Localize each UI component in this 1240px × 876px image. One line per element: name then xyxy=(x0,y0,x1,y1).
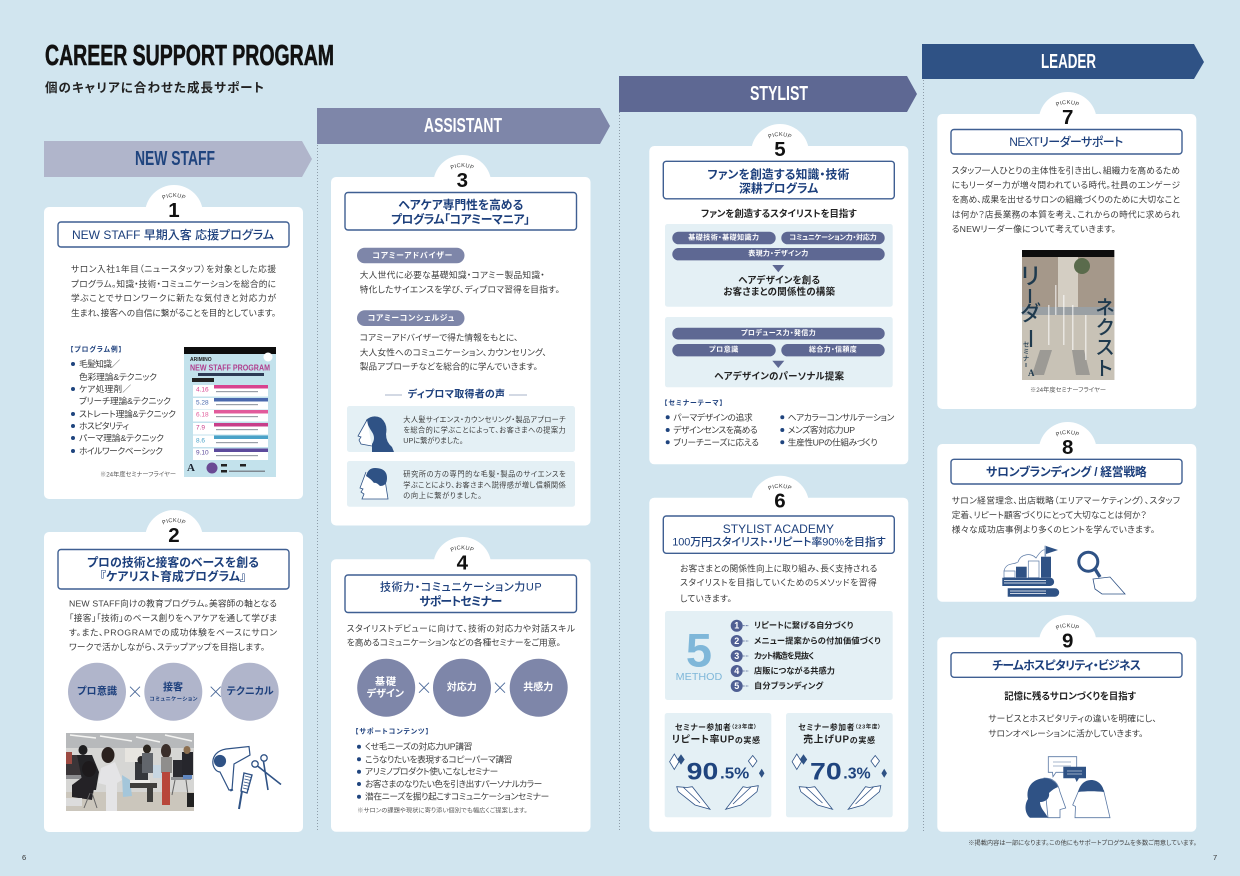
subtitle: 個のキャリアに合わせた成長サポート xyxy=(45,80,264,95)
body text: にもリーダー力が増々問われている時代。社員のエンゲージ xyxy=(952,179,1181,190)
heading box xyxy=(951,459,1182,484)
program list: 色彩理論&テクニック xyxy=(79,371,157,382)
body text: 定着、リピート顧客づくりにとって大切なことは何か？ xyxy=(952,509,1147,520)
heading box: STYLIST ACADEMY xyxy=(723,522,834,536)
stat: sales up xyxy=(786,713,893,817)
flyer: new staff program: 6.18 xyxy=(196,412,209,418)
panel: 5 method: METHOD xyxy=(676,671,723,683)
body text xyxy=(71,263,276,318)
pickup badge 4: PICKUP xyxy=(450,545,474,552)
pickup badge 2: PICKUP xyxy=(162,518,186,524)
stat: sales up: セミナー参加者（23年度） xyxy=(798,722,881,732)
body text: サービスとホスピタリティの違いを明確にし、 xyxy=(988,713,1157,724)
flyer: new staff program: ARIMINO xyxy=(190,357,212,363)
panel: pickup 5 xyxy=(649,124,908,464)
seminar themes: デザインセンスを高める xyxy=(673,424,758,435)
panel: personal proposal: 総合力・信頼度 xyxy=(809,345,857,354)
stat: sales up: 70 xyxy=(810,758,842,786)
panel: pickup 4 xyxy=(331,537,590,832)
panel: 5 method: リピートに繋げる自分づくり xyxy=(754,620,853,630)
program list: ストレート理論&テクニック xyxy=(79,408,176,419)
flyer: next leader seminar: ス xyxy=(1096,337,1114,359)
lead text: 記憶に残るサロンづくりを目指す xyxy=(1004,690,1136,702)
pickup badge 8: PICKUP xyxy=(1056,430,1079,436)
body text xyxy=(680,562,877,603)
pickup badge 4 xyxy=(450,545,474,574)
support contents list xyxy=(355,728,549,814)
body text xyxy=(69,597,277,652)
text: concierge: 製品アプローチなどを総合的に学んでいきます。 xyxy=(360,361,538,372)
stat: repeat rate xyxy=(665,713,771,817)
body text: スタイリストを目指していくための5メソッドを習得 xyxy=(680,577,877,588)
panel: relationship building: 基礎技術・基礎知識力 xyxy=(688,232,759,242)
panel: pickup 3 xyxy=(331,155,590,526)
flyer: new staff program: 7.9 xyxy=(196,424,205,432)
heading box: 技術力・コミュニケーション力UP xyxy=(380,579,542,593)
heading box: NEW STAFF 早期入客 応援プログラム xyxy=(72,227,274,242)
arrow: LEADER: LEADER xyxy=(1041,51,1096,73)
body text xyxy=(951,164,1181,234)
support contents list: くせ毛ニーズの対応力UP講習 xyxy=(365,741,472,752)
voice 2: 研究所の方の専門的な毛髪・製品のサイエンスを xyxy=(403,470,566,478)
heading box: サポートセミナー xyxy=(419,595,502,609)
three circles: テクニカル xyxy=(226,686,274,698)
panel: relationship building: コミュニケーション力・対応力 xyxy=(789,232,877,242)
body text: す。また、PROGRAMでの成功体験をベースにサロン xyxy=(69,626,277,637)
arrow: LEADER xyxy=(922,44,1204,79)
panel: 5 method xyxy=(665,611,893,700)
three circles: 基礎 xyxy=(375,675,396,688)
flyer: new staff program xyxy=(184,347,276,477)
voice 2: 学ぶことにより、お客さまへ説得感が増し信頼関係 xyxy=(403,480,566,490)
pickup badge 6: 6 xyxy=(774,490,786,513)
pickup badge 2 xyxy=(162,518,186,547)
flyer: next leader seminar: セ xyxy=(1023,340,1029,348)
panel: personal proposal: プロ意識 xyxy=(709,345,738,354)
seminar themes: ヘアカラーコンサルテーション xyxy=(788,412,894,422)
panel: 5 method: 自分ブランディング xyxy=(754,680,824,690)
panel: 5 method: 2 xyxy=(734,636,739,646)
body text: を高め、成果を出せるサロンの組織づくりのために大切なこと xyxy=(952,194,1180,205)
flyer: new staff program: 8.6 xyxy=(196,438,205,444)
support contents list: アリミノプロダクト使いこなしセミナー xyxy=(365,766,498,777)
heading box: プログラム「コアミーマニア」 xyxy=(391,212,530,226)
seminar themes: 【セミナーテーマ】 xyxy=(664,399,723,407)
stat: repeat rate: リピート率UPの実感 xyxy=(672,732,760,746)
heading box: 『ケアリスト育成プログラム』 xyxy=(100,570,246,584)
program list: ホイルワークベーシック xyxy=(79,446,163,456)
program list: ホスピタリティ xyxy=(79,421,129,431)
stat: repeat rate: セミナー参加者（23年度） xyxy=(675,722,757,732)
icon: long hair head xyxy=(358,416,394,452)
arrow: NEW STAFF: NEW STAFF xyxy=(135,148,215,170)
pickup badge 1: 1 xyxy=(168,199,180,222)
heading box: ヘアケア専門性を高める xyxy=(398,198,523,212)
pickup badge 9: PICKUP xyxy=(1056,623,1079,630)
panel: relationship building: ヘアデザインを創る xyxy=(738,274,820,286)
heading box: ファンを創造する知識・技術 xyxy=(707,167,849,181)
heading box: 100万円スタイリスト・リピート率90%を目指す xyxy=(672,535,886,549)
panel: 5 method: カット構造を見抜く xyxy=(754,650,814,660)
arrow: NEW STAFF xyxy=(44,141,312,177)
body text: を高めるコミュニケーションなどの各種セミナーをご用意。 xyxy=(347,637,561,648)
flyer: next leader seminar: ト xyxy=(1097,358,1113,380)
program list: ケア処理剤／ xyxy=(79,383,131,394)
program list: ※24年度セミナーフライヤー xyxy=(100,470,176,478)
panel: relationship building xyxy=(665,224,893,307)
icon: diamonds and hands xyxy=(670,754,764,809)
heading box xyxy=(663,516,894,553)
heading box: チームホスピタリティ・ビジネス xyxy=(992,659,1141,673)
pickup badge 7 xyxy=(1056,100,1079,129)
body text: 学ぶことでサロンワークに新たな気付きと対応力が xyxy=(71,292,276,303)
panel: pickup 1 xyxy=(44,185,303,499)
body text: スタッフ一人ひとりの主体性を引き出し、組織力を高めるため xyxy=(951,164,1180,175)
pickup badge 4: 4 xyxy=(457,551,469,574)
support contents list: こうなりたいを表現するコピーパーマ講習 xyxy=(365,753,512,764)
flyer: next leader seminar: ミ xyxy=(1023,348,1029,356)
page number 6: 6 xyxy=(22,853,26,862)
pickup badge 8 xyxy=(1056,430,1079,459)
support contents list: ※サロンの課題や現状に寄り添い個別でも幅広くご提案します。 xyxy=(357,806,527,814)
title: CAREER SUPPORT PROGRAM xyxy=(45,40,334,72)
pickup badge 1 xyxy=(162,193,186,222)
heading box: NEXTリーダーサポート xyxy=(1009,134,1123,149)
seminar themes: ブリーチニーズに応える xyxy=(673,436,759,447)
panel: relationship building: お客さまとの関係性の構築 xyxy=(723,286,836,297)
body text: サロン経営理念、出店戦略（エリアマーケティング）、スタッフ xyxy=(951,494,1180,505)
icon: diamonds and hands xyxy=(792,754,886,809)
heading box xyxy=(345,575,576,612)
heading box xyxy=(58,222,289,247)
voice 1: を総合的に学ぶことによって、お客さまへの提案力 xyxy=(403,426,566,434)
text: adviser xyxy=(360,269,560,294)
body text: していきます。 xyxy=(680,593,732,603)
flyer: new staff program: 9.10 xyxy=(196,450,209,456)
caption: ※24年度セミナーフライヤー xyxy=(1030,386,1106,394)
pickup badge 9 xyxy=(1056,623,1079,652)
pickup badge 5: PICKUP xyxy=(768,132,792,138)
body text xyxy=(988,713,1157,738)
text: adviser: 大人世代に必要な基礎知識・コアミー製品知識・ xyxy=(360,269,545,280)
body text: ワークで活かしながら、ステップアップを目指します。 xyxy=(69,641,265,652)
pickup badge 7: PICKUP xyxy=(1056,100,1079,106)
panel: 5 method: 店販につながる共感力 xyxy=(754,666,835,676)
flyer: next leader seminar: ネ xyxy=(1096,297,1114,319)
pickup badge 8: 8 xyxy=(1062,436,1073,459)
panel: 5 method: 1 xyxy=(734,621,739,631)
page number 7: 7 xyxy=(1213,853,1217,862)
seminar themes: 生産性UPの仕組みづくり xyxy=(788,436,878,447)
flyer: new staff program: 4.16 xyxy=(196,386,209,394)
body text: 生まれ、接客への自信に繋がることを目的としています。 xyxy=(71,307,276,318)
pickup badge 5: 5 xyxy=(774,138,786,161)
pickup badge 5 xyxy=(768,132,792,161)
program list: 【プログラム例】 xyxy=(70,344,122,354)
voice 1: UPに繋がりました。 xyxy=(403,436,463,445)
stat: repeat rate: .5% xyxy=(720,766,749,782)
body text: 様々な成功店事例より多くのヒントを学んでいきます。 xyxy=(952,524,1155,535)
heading box xyxy=(951,130,1182,154)
heading: diploma voices: ディプロマ取得者の声 xyxy=(407,388,505,400)
flyer: new staff program: NEW STAFF PROGRAM xyxy=(190,362,270,372)
body text: は何か？店長業務の本質を考え、これからの時代に求められ xyxy=(952,208,1180,219)
program list xyxy=(70,344,176,478)
panel: pickup 2 xyxy=(44,510,303,832)
flyer: next leader seminar: リ xyxy=(1021,263,1039,289)
flyer: next leader seminar: ナ xyxy=(1023,354,1029,362)
text: concierge: コアミーアドバイザーで得た情報をもとに、 xyxy=(360,332,518,343)
panel: 5 method: 5 xyxy=(686,624,712,676)
body text xyxy=(951,494,1180,535)
text: concierge: 大人女性へのコミュニケーション、カウンセリング、 xyxy=(360,346,547,357)
pickup badge 9: 9 xyxy=(1062,629,1073,652)
three circles xyxy=(357,659,568,717)
photo: seminar room xyxy=(66,733,194,811)
seminar themes xyxy=(664,399,894,447)
icon: two people talking xyxy=(1026,757,1110,818)
seminar themes: パーマデザインの追求 xyxy=(673,411,753,422)
flyer: next leader seminar xyxy=(1020,250,1114,380)
lead text: ファンを創造するスタイリストを目指す xyxy=(701,208,857,219)
label: core me concierge xyxy=(357,310,464,326)
flyer: new staff program: A xyxy=(187,462,195,474)
panel: 5 method: 3 xyxy=(734,651,739,661)
text: adviser: 特化したサイエンスを学び、ディプロマ習得を目指す。 xyxy=(360,283,560,294)
body text xyxy=(346,622,575,648)
arrow: STYLIST: STYLIST xyxy=(750,83,808,105)
panel: pickup 7 xyxy=(937,92,1196,409)
body text: るNEWリーダー像について考えていきます。 xyxy=(951,223,1116,234)
pickup badge 2: 2 xyxy=(168,524,180,547)
panel: pickup 6 xyxy=(649,476,908,832)
body text: スタイリストデビューに向けて、技術の対応力や対話スキル xyxy=(346,622,575,633)
body text: プログラム。知識・技術・コミュニケーションを総合的に xyxy=(71,278,276,289)
icon: magnifier xyxy=(1079,552,1125,594)
text: concierge xyxy=(360,332,547,372)
icon: dryer, comb, scissors xyxy=(213,746,281,809)
panel: 5 method: 5 xyxy=(734,681,739,691)
pickup badge 1: PICKUP xyxy=(162,193,186,200)
heading box xyxy=(951,653,1182,677)
stat: sales up: .3% xyxy=(843,766,871,782)
pickup badge 3: 3 xyxy=(457,169,468,192)
support contents list: お客さまのなりたい色を引き出すパーソナルカラー xyxy=(365,778,542,789)
seminar themes: メンズ客対応力UP xyxy=(787,424,855,435)
flyer: next leader seminar: ダ xyxy=(1020,302,1041,326)
heading box: サロンブランディング / 経営戦略 xyxy=(986,465,1147,479)
heading box: 深耕プログラム xyxy=(739,181,819,195)
panel: 5 method: メニュー提案からの付加価値づくり xyxy=(754,636,881,646)
label: core me adviser: コアミーアドバイザー xyxy=(372,251,453,260)
label: core me concierge: コアミーコンシェルジュ xyxy=(368,314,454,322)
heading box: プロの技術と接客のベースを創る xyxy=(87,556,259,570)
pickup badge 3 xyxy=(450,163,474,192)
three circles: 共感力 xyxy=(523,680,553,694)
pickup badge 3: PICKUP xyxy=(450,163,474,170)
stat: sales up: 売上げUPの実感 xyxy=(803,732,875,746)
body text: 「接客」「技術」のベース創りをヘアケアを通して学びま xyxy=(69,612,277,623)
three circles: デザイン xyxy=(366,687,404,700)
body text: お客さまとの関係性向上に取り組み、長く支持される xyxy=(680,562,877,573)
voice 1: 大人髪サイエンス・カウンセリング・製品アプローチ xyxy=(403,415,566,424)
program list: ブリーチ理論&テクニック xyxy=(79,395,171,406)
label: core me adviser xyxy=(357,248,464,263)
support contents list: 【サポートコンテンツ】 xyxy=(355,728,429,736)
icon: chart on books xyxy=(1002,546,1059,597)
footnote: ※掲載内容は一部になります。この他にもサポートプログラムを多数ご用意しています。 xyxy=(968,839,1197,847)
voice 2 xyxy=(347,461,575,507)
three circles: 対応力 xyxy=(447,680,477,694)
three circles xyxy=(68,663,279,721)
panel: pickup 9 xyxy=(937,615,1196,832)
flyer: next leader seminar: ク xyxy=(1096,317,1114,339)
flyer: new staff program: 5.28 xyxy=(196,400,209,406)
support contents list: 潜在ニーズを掘り起こすコミュニケーションセミナー xyxy=(365,791,549,802)
pickup badge 6: PICKUP xyxy=(768,484,792,490)
panel: 5 method: 4 xyxy=(734,666,739,676)
arrow: ASSISTANT: ASSISTANT xyxy=(424,115,502,137)
heading box xyxy=(345,192,576,230)
arrow: STYLIST xyxy=(619,76,917,112)
panel: personal proposal: ヘアデザインのパーソナル提案 xyxy=(714,370,845,382)
pickup badge 7: 7 xyxy=(1062,106,1073,129)
heading box xyxy=(58,550,289,589)
arrow: ASSISTANT xyxy=(317,108,610,144)
pickup badge 6 xyxy=(768,484,792,513)
panel: pickup 8 xyxy=(937,422,1196,602)
body text: サロン入社1年目（ニュースタッフ）を対象とした応援 xyxy=(71,263,276,274)
voice 1 xyxy=(347,406,575,452)
body text: NEW STAFF向けの教育プログラム。美容師の軸となる xyxy=(69,597,277,608)
program list: 毛髪知識／ xyxy=(79,358,120,369)
panel: relationship building: 表現力・デザイン力 xyxy=(748,249,808,258)
flyer: next leader seminar: A xyxy=(1028,368,1035,378)
three circles: 接客 xyxy=(163,680,183,694)
heading box xyxy=(663,161,894,199)
program list: パーマ理論&テクニック xyxy=(79,432,164,443)
stat: repeat rate: 90 xyxy=(687,758,718,786)
panel: personal proposal xyxy=(665,317,893,387)
voice 2: の向上に繋がりました。 xyxy=(403,491,482,500)
panel: personal proposal: プロデュース力・発信力 xyxy=(741,328,816,337)
icon: short hair head xyxy=(360,468,388,499)
body text: サロンオペレーションに活かしていきます。 xyxy=(988,727,1143,738)
three circles: プロ意識 xyxy=(77,684,117,698)
three circles: コミュニケーション xyxy=(149,694,198,702)
